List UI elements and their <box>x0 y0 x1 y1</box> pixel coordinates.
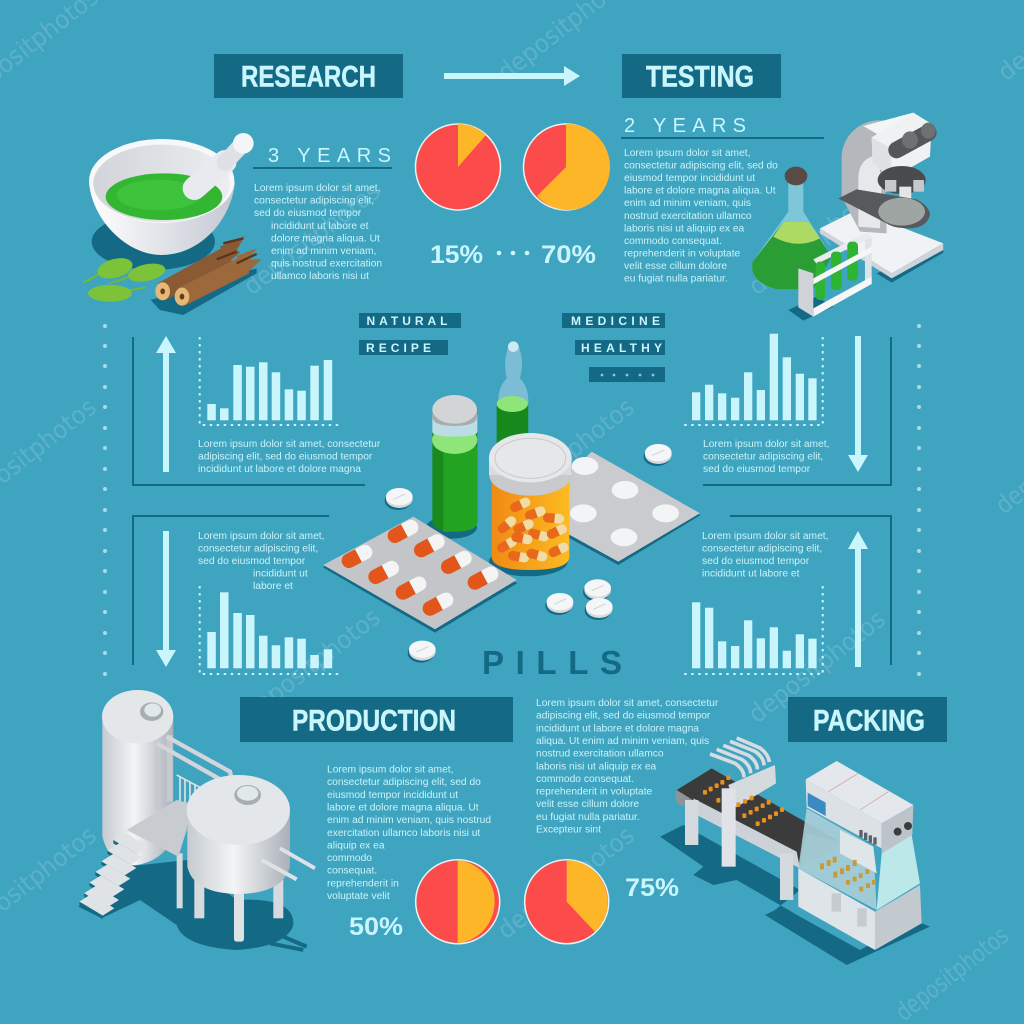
text block: Lorem ipsum dolor sit amet, consectetur <box>198 439 381 450</box>
text block: testing: velit esse cillum dolore <box>624 261 727 272</box>
text block: consectetur adipiscing elit, <box>703 452 823 462</box>
percent: 75%: 75% <box>625 874 679 902</box>
labels: natural, recipe, medicine, healthy: RECIPE <box>366 341 431 355</box>
labels: natural, recipe, medicine, healthy: NATURAL <box>366 314 448 328</box>
text block: sed do eiusmod tempor <box>703 464 811 475</box>
panel: top-left chart <box>133 336 381 485</box>
text block: production: reprehenderit in <box>327 878 399 889</box>
text block: adipiscing elit, sed do eiusmod tempor <box>198 452 373 462</box>
text block: testing: enim ad minim veniam, quis <box>624 198 751 209</box>
watermark: depositphotos <box>743 604 891 729</box>
panel: bottom-right chart <box>682 516 891 674</box>
text block: packing: nostrud exercitation ullamco <box>536 749 664 760</box>
text block: packing: eu fugiat nulla pariatur. <box>536 812 640 823</box>
watermark: depositphotos <box>492 820 640 945</box>
text block: packing: velit esse cillum dolore <box>536 799 639 810</box>
percent labels: 15% and 70% <box>430 241 596 269</box>
text block: incididunt ut labore et <box>702 568 800 580</box>
text block: research: quis nostrud exercitation <box>271 259 382 270</box>
illustration: packing conveyor and machine <box>660 738 930 965</box>
pie chart: research 15% <box>416 124 500 210</box>
text block: production: aliquip ex ea <box>327 840 385 851</box>
text block: testing: eiusmod tempor incididunt ut <box>624 173 755 184</box>
text block: testing: consectetur adipiscing elit, sed do <box>624 161 778 172</box>
text block: research: sed do eiusmod tempor <box>254 208 362 219</box>
arrow: up <box>156 336 176 472</box>
text block: production: eiusmod tempor incididunt ut <box>327 790 458 801</box>
heading: production <box>240 697 513 742</box>
panel: top-right chart <box>682 334 891 485</box>
text block: testing: Lorem ipsum dolor sit amet, <box>624 148 750 159</box>
text block: production: commodo <box>327 853 372 864</box>
label: pills: PILLS <box>482 644 622 681</box>
bar chart <box>200 337 340 425</box>
arrow: down <box>848 336 868 472</box>
text block: packing: Excepteur sint <box>536 824 601 836</box>
heading: testing: TESTING <box>646 60 754 94</box>
heading: research <box>214 54 403 98</box>
text block: production: voluptate velit <box>327 891 390 902</box>
text block: packing: incididunt ut labore et dolore magna <box>536 723 699 734</box>
bar chart <box>682 586 823 674</box>
text block: production: consequat. <box>327 866 377 877</box>
text block: packing: Lorem ipsum dolor sit amet, consectetur <box>536 698 719 709</box>
arrow: research to testing <box>444 66 580 86</box>
text block: Lorem ipsum dolor sit amet, <box>702 531 828 542</box>
text block: incididunt ut <box>253 568 308 580</box>
icon: mortar, pestle, cinnamon and leaves <box>84 133 262 315</box>
text block: testing: laboris nisi ut aliquip ex ea <box>624 223 745 234</box>
text block: testing: nostrud exercitation ullamco <box>624 211 752 222</box>
panel: bottom-left chart <box>133 516 340 674</box>
duration: 3 years: 3 YEARS <box>268 145 391 167</box>
text block: production: labore et dolore magna aliqua. Ut <box>327 802 479 813</box>
arrow: down <box>156 531 176 667</box>
text block: testing: labore et dolore magna aliqua. Ut <box>624 186 776 197</box>
illustration: pills, vials and blisters <box>323 341 701 663</box>
text block: research: incididunt ut labore et <box>271 221 369 232</box>
text block: testing: commodo consequat. <box>624 236 722 247</box>
text block: production: consectetur adipiscing elit, sed do <box>327 777 481 788</box>
text block: research: dolore magna aliqua. Ut <box>271 233 380 244</box>
text block: packing: aliqua. Ut enim ad minim veniam, quis <box>536 736 709 747</box>
watermark: depositphotos <box>743 176 891 301</box>
text block: testing: reprehenderit in voluptate <box>624 248 741 259</box>
watermark: depositphotos <box>492 392 640 517</box>
text block: packing: commodo consequat. <box>536 774 634 785</box>
percent labels: 15% and 70%: 70% <box>541 241 596 269</box>
heading: production: PRODUCTION <box>292 704 456 738</box>
labels: natural, recipe, medicine, healthy: HEALTHY <box>581 341 662 355</box>
labels: natural, recipe, medicine, healthy <box>359 313 665 382</box>
text block: production: Lorem ipsum dolor sit amet, <box>327 764 453 776</box>
bar chart <box>200 586 340 674</box>
text block: packing: adipiscing elit, sed do eiusmod tempor <box>536 711 711 722</box>
heading: packing <box>788 697 947 742</box>
labels: natural, recipe, medicine, healthy: MEDICINE <box>571 314 660 328</box>
heading: packing: PACKING <box>813 704 925 738</box>
text block: packing: laboris nisi ut aliquip ex ea <box>536 761 657 772</box>
text block: packing: reprehenderit in voluptate <box>536 787 653 798</box>
dotted column: right <box>917 324 921 676</box>
pie chart: production 50% <box>416 860 500 944</box>
text block: labore et <box>253 581 293 592</box>
percent: 50%: 50% <box>349 913 403 941</box>
watermark: depositphotos <box>238 176 386 301</box>
arrow: up <box>848 531 868 667</box>
icon: microscope, flask and test tubes <box>752 113 943 321</box>
text block: research: enim ad minim veniam, <box>271 246 376 257</box>
bar chart <box>682 334 823 425</box>
text block: production: enim ad minim veniam, quis nostrud <box>327 815 491 826</box>
text block: consectetur adipiscing elit, <box>702 544 822 554</box>
heading: testing <box>622 54 781 98</box>
text block: sed do eiusmod tempor <box>702 556 810 567</box>
text block: production: exercitation ullamco laboris nisi ut <box>327 828 480 839</box>
text block: sed do eiusmod tempor <box>198 556 306 567</box>
text block: Lorem ipsum dolor sit amet, <box>703 439 829 450</box>
heading: research: RESEARCH <box>241 60 376 94</box>
illustration: production tanks <box>78 690 315 950</box>
text block: testing: eu fugiat nulla pariatur. <box>624 274 728 284</box>
dotted column: left <box>103 324 107 676</box>
pie chart: packing 75% <box>525 860 609 944</box>
pie chart: testing 70% <box>524 124 610 210</box>
text block: research: ullamco laboris nisi ut <box>271 271 369 282</box>
text block: research: consectetur adipiscing elit, <box>254 196 374 207</box>
watermark: depositphotos <box>238 602 386 727</box>
percent labels: 15% and 70%: 15% <box>430 241 483 269</box>
text block: Lorem ipsum dolor sit amet, <box>198 531 324 542</box>
duration: 2 years: 2 YEARS <box>624 115 746 137</box>
text block: research: Lorem ipsum dolor sit amet, <box>254 183 380 194</box>
text block: incididunt ut labore et dolore magna <box>198 464 361 475</box>
text block: consectetur adipiscing elit, <box>198 544 318 554</box>
